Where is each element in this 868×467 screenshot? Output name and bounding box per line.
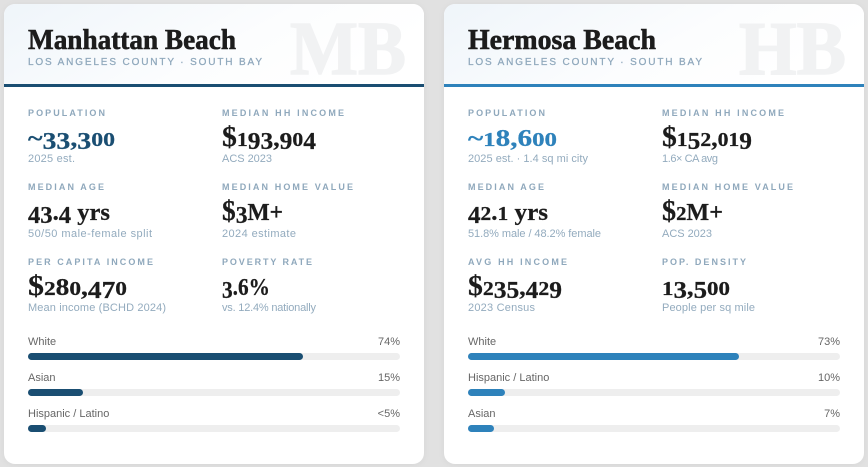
stat: median home value: $2M+ xyxy=(662,196,723,227)
stat: population xyxy=(468,108,588,165)
stat: population: 00 xyxy=(91,129,115,151)
stat: median home value: MEDIAN HOME VALUE xyxy=(662,182,793,192)
stat: median age: yrs xyxy=(71,200,110,226)
stat: population: ~ xyxy=(28,126,40,152)
stat: population density: People per sq mile xyxy=(662,302,755,314)
stat: poverty rate: 3 xyxy=(222,278,233,304)
stat: per capita income: Mean income (BCHD 2024) xyxy=(28,302,166,314)
subtitle: LOS ANGELES COUNTY · SOUTH BAY xyxy=(28,57,262,68)
stat: median age: 43 xyxy=(28,203,53,229)
stat: average household income: 2 xyxy=(538,278,549,300)
stat: median home value: $ xyxy=(222,196,236,227)
stat: median age: MEDIAN AGE xyxy=(468,182,544,192)
stat: median age: 4 xyxy=(59,203,71,229)
stat: population: 2025 est. xyxy=(28,153,75,165)
title: Manhattan Beach: Manhattan Beach xyxy=(28,24,236,56)
stat: median home value: M+ xyxy=(247,200,283,226)
watermark: MB: MB xyxy=(290,7,406,91)
stat: median home value xyxy=(662,182,793,240)
stat: median household income: 9 xyxy=(280,129,292,155)
stat: population density: 00 xyxy=(707,278,730,300)
stat: average household income: , xyxy=(519,275,526,301)
stat: population: 33 xyxy=(42,129,70,155)
stat: poverty rate: POVERTY RATE xyxy=(222,257,312,267)
stat: per capita income: $280, xyxy=(28,271,87,302)
stat: median age xyxy=(28,182,152,240)
stat: median household income: 0 xyxy=(292,129,303,151)
bar: Hispanic / Latino 10%: 10% xyxy=(818,372,840,384)
stat: median household income: 9 xyxy=(739,129,752,155)
card header: Manhattan Beach xyxy=(4,4,424,91)
stat: population: POPULATION xyxy=(28,108,105,118)
bar: Asian 7%: Asian xyxy=(468,408,496,420)
stat: median household income: 2 xyxy=(700,129,711,151)
bar: White 74% xyxy=(28,336,400,360)
stat: per capita income: 0 xyxy=(115,278,127,300)
panel: Manhattan Beach card xyxy=(4,4,424,464)
stat: per capita income xyxy=(28,257,166,314)
watermark: HB: HB xyxy=(739,7,846,91)
bar: Hispanic / Latino under 5%: <5% xyxy=(378,408,400,420)
stat: population: ~18,6 00 xyxy=(468,126,557,152)
stat: population density: POP. DENSITY xyxy=(662,257,746,267)
stat: median household income: , xyxy=(273,126,280,152)
bar: White 74%: White xyxy=(28,336,56,348)
stat: median age: 51.8% male / 48.2% female xyxy=(468,228,601,240)
stat: average household income xyxy=(468,257,567,314)
card header: Hermosa Beach xyxy=(444,4,864,91)
stat: median age: 4 xyxy=(468,203,481,229)
stat: population: 3 xyxy=(77,129,91,155)
stat: median age: 2 xyxy=(481,203,491,225)
stat: median age: MEDIAN AGE xyxy=(28,182,104,192)
bar: White 74%: 74% xyxy=(378,336,400,348)
stat: population xyxy=(28,108,115,165)
stat: average household income: 35 xyxy=(494,278,519,304)
stat: average household income: 2023 Census xyxy=(468,302,536,314)
stat: median household income: 4 xyxy=(303,129,316,155)
bar: Hispanic / Latino 10%: Hispanic / Latino xyxy=(468,372,549,384)
stat: per capita income: 47 xyxy=(88,278,115,304)
stat: median home value: 2024 estimate xyxy=(222,228,296,240)
stat: median age: 50/50 male-female split xyxy=(28,228,152,240)
stat: median household income: 93 xyxy=(248,129,273,155)
bar: Asian 7%: 7% xyxy=(824,408,840,420)
bar: Asian 15%: 15% xyxy=(378,372,400,384)
stat: population: , xyxy=(70,126,77,152)
stat: average household income: AVG HH INCOME xyxy=(468,257,567,267)
subtitle: LOS ANGELES COUNTY · SOUTH BAY xyxy=(468,57,702,68)
stat: median home value: ACS 2023 xyxy=(662,228,712,240)
bar: Hispanic / Latino under 5%: Hispanic / Latino xyxy=(28,408,109,420)
bar: Hispanic / Latino under 5% xyxy=(28,408,400,432)
stat: population: 2025 est. · 1.4 sq mi city xyxy=(468,153,588,165)
stat: median household income xyxy=(222,108,344,165)
stat: median household income xyxy=(662,108,784,165)
stat: median household income: ACS 2023 xyxy=(222,153,272,165)
title: Hermosa Beach: Hermosa Beach xyxy=(468,24,656,56)
stat: population density: , xyxy=(687,275,694,301)
bar: Asian 15% xyxy=(28,372,400,396)
stat: median household income: $1 xyxy=(222,122,247,153)
stat: population density: 1 xyxy=(662,278,673,300)
stat: median home value: 3 xyxy=(236,203,247,229)
bar: Hispanic / Latino 10% xyxy=(468,372,840,396)
stat: population density: 5 xyxy=(694,278,707,304)
stat: per capita income: PER CAPITA INCOME xyxy=(28,257,153,267)
bar: Asian 7% xyxy=(468,408,840,432)
stat: median household income: $1 xyxy=(662,122,687,153)
stat: median household income: MEDIAN HH INCOME xyxy=(662,108,784,118)
stat: median age xyxy=(468,182,601,240)
stat: median household income: 5 xyxy=(688,129,700,155)
stat: median home value: MEDIAN HOME VALUE xyxy=(222,182,353,192)
stat: poverty rate: vs. 12.4% nationally xyxy=(222,302,316,314)
stat: population: POPULATION xyxy=(468,108,545,118)
stat: median home value xyxy=(222,182,353,240)
stat: median household income: ,01 xyxy=(711,126,738,152)
stat: median household income: MEDIAN HH INCOME xyxy=(222,108,344,118)
stat: poverty rate xyxy=(222,257,316,314)
bar: White 73%: 73% xyxy=(818,336,840,348)
panel: Hermosa Beach card xyxy=(444,4,864,464)
stat: median household income: 1.6× CA avg xyxy=(662,153,718,165)
bar: White 73%: White xyxy=(468,336,496,348)
stat: population density xyxy=(662,257,755,314)
stat: population density: 3 xyxy=(673,278,687,304)
stat: median age: .1 yrs xyxy=(491,200,546,226)
stat: average household income: $2 xyxy=(468,271,493,302)
stat: average household income: 9 xyxy=(549,278,562,304)
stat: average household income: 4 xyxy=(526,278,538,304)
stat: median age: . xyxy=(53,200,59,226)
bar: White 73% xyxy=(468,336,840,360)
bar: Asian 15%: Asian xyxy=(28,372,56,384)
stat: poverty rate: .6% xyxy=(233,275,270,301)
